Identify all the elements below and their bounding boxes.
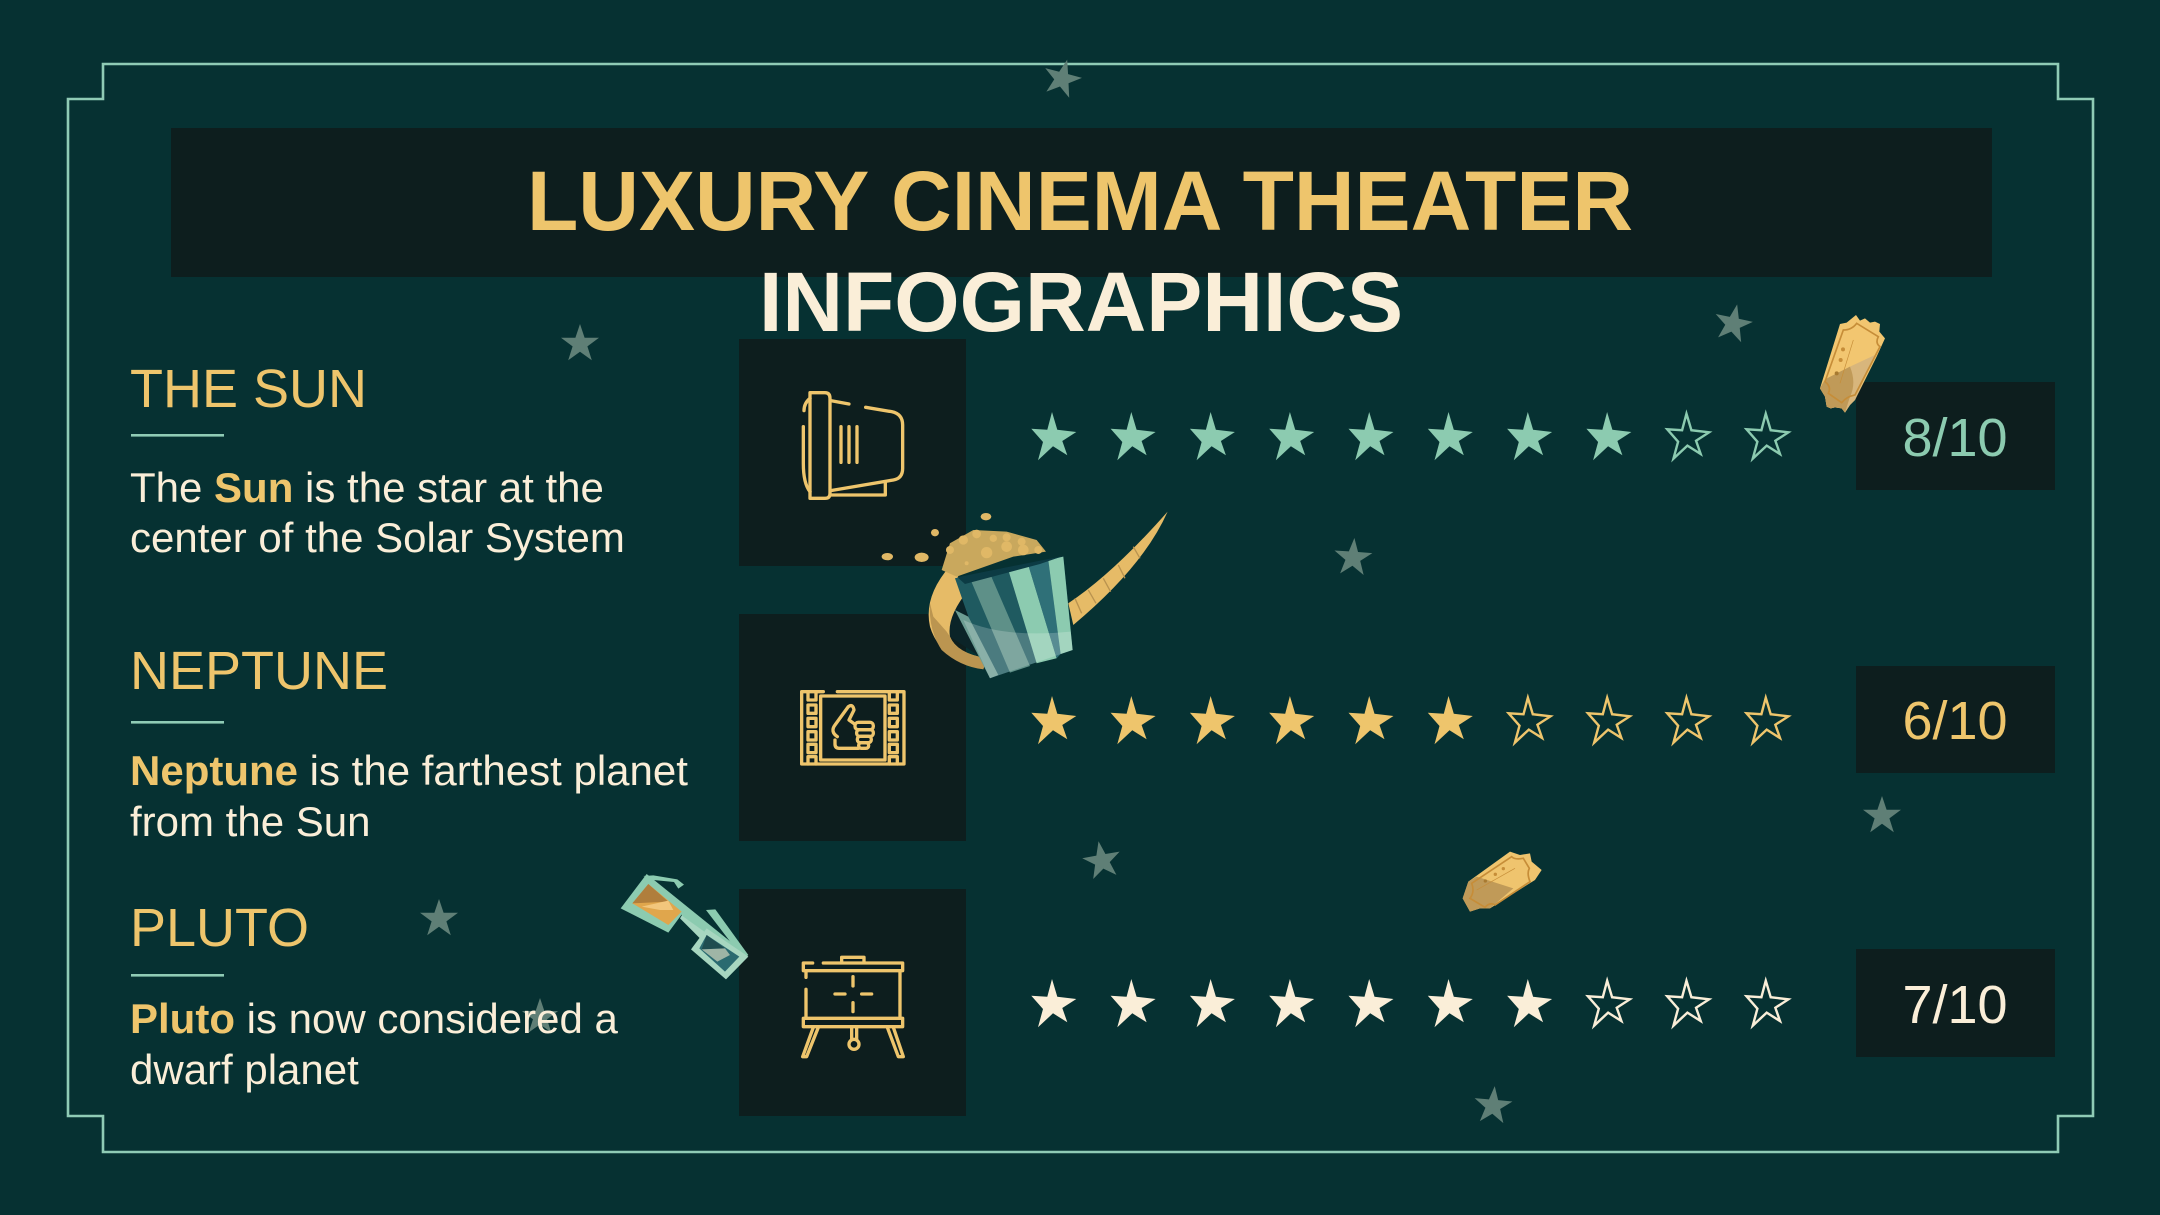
icon: ticket lower <box>1463 852 1542 912</box>
panel: neptune text: Neptune is the farthest planet <box>130 747 688 794</box>
rating stars: row 3 <box>1031 979 1788 1027</box>
title: INFOGRAPHICS <box>759 255 1403 349</box>
title bar <box>171 128 1992 277</box>
icon: 3D glasses <box>621 874 748 979</box>
score: 6/10: 6/10 <box>1902 691 2008 751</box>
rating stars: row 1 <box>1031 412 1788 460</box>
panel: the sun text: THE SUN <box>130 359 367 419</box>
panel: neptune text: from the Sun <box>130 798 370 845</box>
score: 6/10 <box>1856 666 2055 773</box>
panel: pluto text: dwarf planet <box>130 1046 359 1093</box>
panel: pluto text <box>130 898 619 1093</box>
icon panel: film thumbs up <box>739 614 966 841</box>
panel: the sun text: Sun is the star at the <box>214 464 604 511</box>
panel: neptune text: NEPTUNE <box>130 641 388 701</box>
panel: the sun text <box>130 359 625 561</box>
panel: pluto text: PLUTO <box>130 898 309 958</box>
score: 8/10: 8/10 <box>1902 408 2008 468</box>
icon panel: easel screen <box>739 889 966 1116</box>
icon panel: projector <box>739 339 966 566</box>
score: 7/10: 7/10 <box>1902 975 2008 1035</box>
background stars <box>420 55 1901 1124</box>
panel: neptune text <box>130 641 688 845</box>
icon: popcorn and film reel <box>882 512 1168 678</box>
panel: pluto text: Pluto is now considered a <box>130 995 619 1042</box>
panel: the sun text: center of the Solar System <box>130 514 625 561</box>
icon: ticket top right <box>1820 315 1885 413</box>
score: 8/10 <box>1856 382 2055 490</box>
rating stars: row 2 <box>1031 696 1788 744</box>
title <box>527 154 1633 349</box>
score: 7/10 <box>1856 949 2055 1057</box>
title: LUXURY CINEMA THEATER <box>527 154 1633 248</box>
panel: the sun text: The <box>130 464 214 511</box>
